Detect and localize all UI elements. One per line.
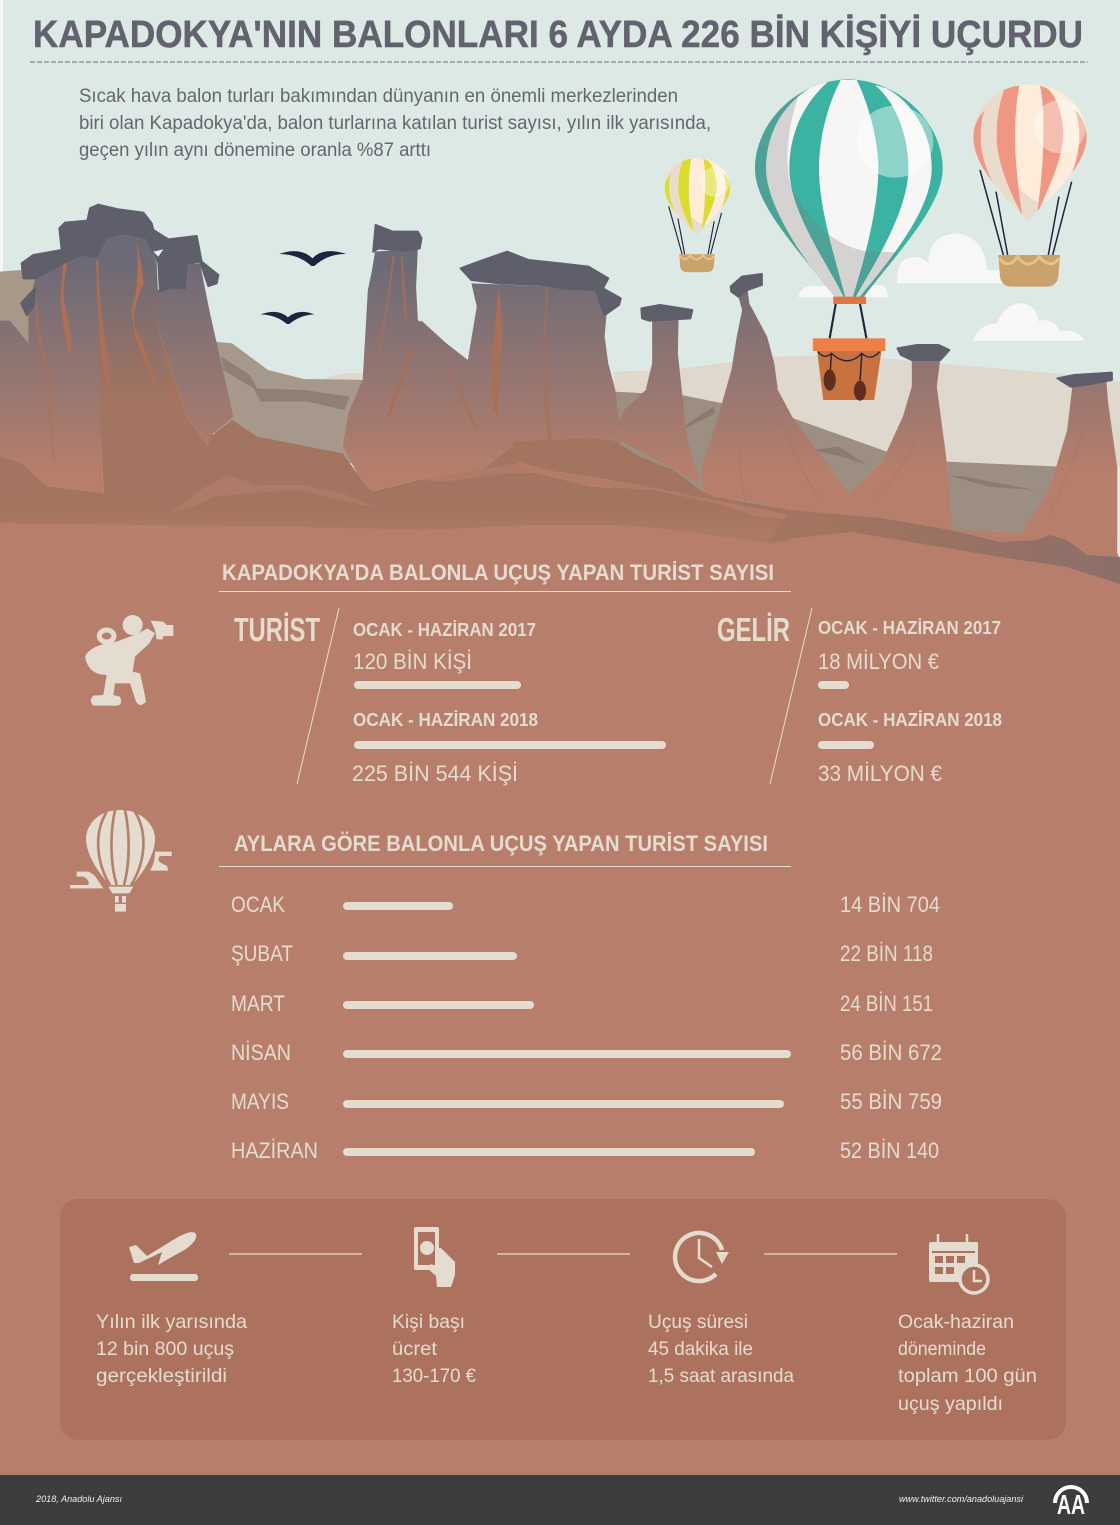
wide rock body	[468, 283, 560, 447]
left cloud	[70, 872, 103, 888]
icon: clock	[675, 1233, 729, 1281]
row: haziran: 52 BİN 140	[840, 1138, 939, 1163]
logo: AA	[1057, 1489, 1085, 1520]
period 2017: OCAK - HAZİRAN 2017	[353, 620, 536, 640]
large teal balloon	[740, 77, 947, 401]
footer	[0, 1475, 1120, 1525]
row: mart: MART	[231, 991, 285, 1016]
head	[123, 615, 143, 635]
page edge strip	[0, 0, 3, 272]
panel: tourist numbers	[234, 608, 666, 786]
ground dark layer	[0, 420, 560, 530]
icon: photographer	[85, 615, 173, 706]
basket	[998, 255, 1060, 287]
envelope	[665, 158, 730, 235]
chimney C cap	[898, 345, 949, 360]
ground layers right	[770, 493, 1120, 600]
label gelir: GELİR	[717, 611, 790, 648]
twitter url: www.twitter.com/anadoluajansi	[899, 1494, 1024, 1504]
bar 2017	[818, 681, 849, 689]
text: flights: 12 bin 800 uçuş	[96, 1339, 234, 1360]
bird upper	[279, 251, 346, 266]
row: mayis: MAYIS	[231, 1089, 289, 1114]
section heading: monthly: AYLARA GÖRE BALONLA UÇUŞ YAPAN TURİST SAYISI	[234, 831, 768, 856]
chimney A	[614, 318, 699, 483]
row: ocak: OCAK	[231, 892, 285, 917]
chimney D	[1021, 382, 1117, 557]
envelope stripes	[974, 86, 1086, 221]
text: flights	[96, 1312, 247, 1387]
row: nisan: 56 BİN 672	[840, 1040, 942, 1065]
column streaks	[377, 257, 407, 360]
dark lower band	[380, 473, 800, 543]
bird lower	[261, 312, 314, 324]
basket	[679, 254, 715, 272]
text: price	[392, 1312, 476, 1387]
text: days: Ocak-haziran	[898, 1312, 1014, 1333]
envelope	[755, 79, 943, 297]
envelope stripes	[755, 80, 934, 297]
column rock	[363, 248, 421, 383]
main rock centre dome	[97, 233, 223, 493]
row: subat	[231, 941, 933, 966]
hill shadow stripe	[221, 357, 349, 410]
distant pale hill	[321, 373, 368, 383]
ground light ridge	[171, 475, 379, 512]
row: nisan	[231, 1040, 942, 1065]
envelope stripes	[665, 158, 730, 235]
basket	[108, 887, 133, 912]
intro text: Sıcak hava balon turları bakımından dünyanın en önemli merkezlerinden	[79, 86, 678, 107]
row: mart: 24 BİN 151	[840, 991, 933, 1016]
cloud right	[973, 303, 1084, 341]
row: ocak	[231, 892, 940, 917]
yellow balloon	[664, 158, 730, 272]
chimney A cap	[641, 305, 692, 321]
logo	[1055, 1487, 1087, 1520]
far left rock	[0, 321, 103, 493]
basket body	[817, 351, 881, 400]
cone rock	[343, 321, 511, 492]
icon: calendar with clock	[929, 1234, 988, 1293]
rocks and ground left of centre	[0, 225, 560, 530]
backpack roll	[99, 630, 114, 642]
panel: facts	[60, 1199, 1066, 1440]
left distant hills	[0, 270, 368, 463]
bar 2018	[354, 741, 666, 749]
sky sliver in cap	[153, 249, 163, 257]
left distant hill	[0, 270, 39, 353]
icon: hand with money	[414, 1227, 455, 1287]
pale far hills	[614, 355, 1120, 467]
dark hump	[512, 438, 800, 517]
row: haziran	[231, 1138, 939, 1163]
wide rock cap	[461, 252, 560, 287]
bar 2017	[354, 681, 521, 689]
text: days: toplam 100 gün	[898, 1366, 1037, 1387]
wide rock streak	[491, 287, 502, 437]
text: days: döneminde	[898, 1339, 986, 1360]
chimney D cap	[1058, 373, 1112, 387]
wide rock cap continuation	[560, 263, 621, 315]
text: duration: 1,5 saat arasında	[648, 1366, 794, 1387]
text: flights: gerçekleştirildi	[96, 1366, 227, 1387]
basket rim	[813, 338, 885, 351]
cloud centre	[898, 233, 1003, 283]
monthly bar chart	[231, 892, 942, 1163]
scenery right: hills, chimneys and clouds	[560, 233, 1120, 557]
ground layers centre	[380, 438, 800, 543]
right dark band	[770, 510, 1120, 584]
envelope	[973, 84, 1087, 221]
icon: plane taking off	[129, 1232, 198, 1281]
ropes	[669, 206, 722, 254]
text: flights: Yılın ilk yarısında	[96, 1312, 247, 1333]
neck	[833, 297, 866, 304]
chimney C	[849, 358, 953, 530]
ground background	[0, 495, 1117, 1525]
chimney cracks	[583, 403, 1092, 517]
intro text	[79, 86, 711, 161]
tassel two	[854, 381, 866, 401]
gondola	[813, 297, 885, 401]
ropes	[980, 170, 1072, 255]
panel background	[60, 1199, 1066, 1440]
row: mayis: 55 BİN 759	[840, 1089, 942, 1114]
panel: revenue numbers	[717, 608, 1002, 786]
large rock group	[0, 205, 233, 493]
grey hills	[614, 392, 1117, 537]
main rock right part	[157, 263, 233, 452]
main rock left part	[28, 255, 104, 493]
row: ocak: 14 BİN 704	[840, 892, 940, 917]
wide rock continuation	[560, 288, 621, 447]
period 2018: OCAK - HAZİRAN 2018	[353, 710, 538, 730]
row: mart	[231, 991, 933, 1016]
row: haziran: HAZİRAN	[231, 1138, 318, 1163]
value 2018: 225 BİN 544 KİŞİ	[352, 761, 518, 786]
ribs	[98, 810, 143, 885]
text: duration	[648, 1312, 794, 1387]
footer bar	[0, 1475, 1120, 1525]
text: duration: Uçuş süresi	[648, 1312, 748, 1333]
chimney B cap	[731, 274, 762, 297]
ropes	[830, 304, 866, 338]
period 2018: OCAK - HAZİRAN 2018	[818, 710, 1002, 730]
icon: balloon	[70, 810, 172, 912]
value 2017: 120 BİN KİŞİ	[353, 649, 472, 674]
text: price: 130-170 €	[392, 1366, 476, 1387]
text: duration: 45 dakika ile	[648, 1339, 753, 1360]
chimney B	[701, 288, 849, 507]
rock streaks	[35, 240, 183, 460]
cone streaks	[388, 342, 479, 432]
row: mayis	[231, 1089, 942, 1114]
text: days: uçuş yapıldı	[898, 1394, 1003, 1415]
wide rock streak two	[543, 287, 552, 440]
value 2017: 18 MİLYON €	[818, 649, 939, 674]
basket scallops	[999, 257, 1059, 264]
rock cap dark	[22, 205, 218, 292]
column cap	[373, 225, 421, 252]
body	[85, 628, 155, 706]
right cloud	[150, 852, 172, 871]
small rock cap	[21, 288, 35, 315]
basket trim	[818, 352, 880, 382]
sky background	[0, 0, 1120, 600]
envelope	[86, 810, 155, 885]
label turist: TURİST	[234, 611, 320, 648]
right light ground	[790, 493, 1120, 600]
ground background lower edge	[1117, 560, 1120, 1525]
tassels	[824, 369, 836, 391]
ground light ridge 2	[418, 463, 560, 482]
cloud behind big balloon	[799, 285, 888, 297]
row: nisan: NİSAN	[231, 1040, 291, 1065]
value 2018: 33 MİLYON €	[818, 761, 942, 786]
row: subat: ŞUBAT	[231, 941, 293, 966]
row: subat: 22 BİN 118	[840, 941, 933, 966]
light wedge	[512, 460, 800, 523]
centre hill	[214, 342, 368, 463]
section heading: tourists flying: KAPADOKYA'DA BALONLA UÇUŞ YAPAN TURİST SAYISI	[222, 560, 774, 585]
intro text: geçen yılın aynı dönemine oranla %87 arttı	[79, 140, 431, 161]
text: price: ücret	[392, 1339, 438, 1360]
camera	[151, 621, 173, 639]
text: price: Kişi başı	[392, 1312, 465, 1333]
intro text: biri olan Kapadokya'da, balon turlarına katılan turist sayısı, yılın ilk yarısında,	[79, 113, 711, 134]
text: days	[898, 1312, 1037, 1415]
bar 2018	[818, 741, 874, 749]
copyright: 2018, Anadolu Ajansı	[35, 1494, 122, 1504]
hill shadows	[683, 407, 1035, 490]
basket scallops	[680, 255, 714, 259]
salmon balloon	[973, 84, 1087, 287]
period 2017: OCAK - HAZİRAN 2017	[818, 618, 1001, 638]
